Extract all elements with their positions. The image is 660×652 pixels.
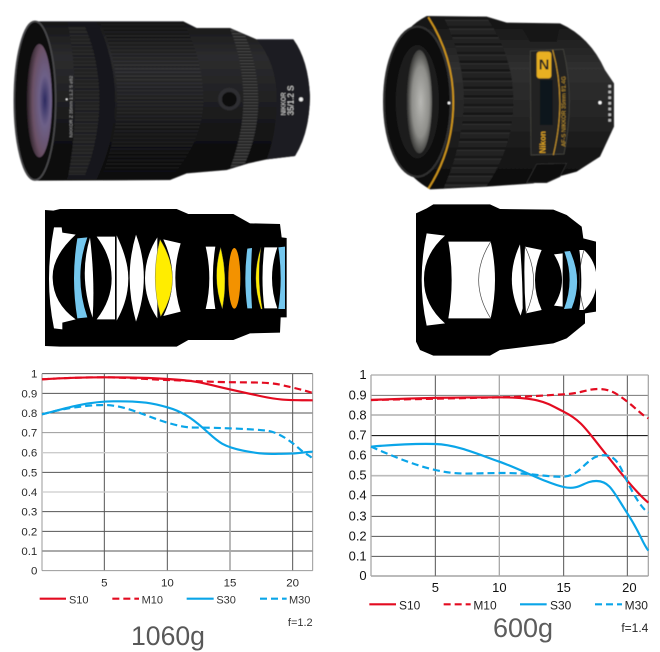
y axis labels: 0.8 <box>349 407 367 422</box>
y axis labels: 0.7 <box>21 428 37 440</box>
curve S30 <box>42 401 313 454</box>
weight: 1060g: 1060g <box>131 621 205 651</box>
lens photo: Nikkor AF-S 35mm f/1.4G <box>384 16 614 189</box>
y axis labels: 0 <box>31 565 37 577</box>
x axis labels: 5 <box>432 580 439 595</box>
lens contacts <box>608 85 611 122</box>
curve S10 <box>42 377 313 400</box>
optical diagram: Z 35mm f/1.2 <box>45 209 287 347</box>
x axis labels: 10 <box>492 580 507 595</box>
y axis labels: 0.5 <box>349 468 367 483</box>
y axis labels <box>21 368 38 577</box>
grid <box>42 373 313 571</box>
y axis labels: 0.9 <box>21 388 37 400</box>
y axis labels: 1 <box>31 368 37 380</box>
optical diagram: AF-S 35mm f/1.4 <box>416 204 597 356</box>
legend: S30 <box>550 598 572 612</box>
x axis labels: 5 <box>101 578 108 590</box>
legend: M10 <box>142 595 163 607</box>
y axis labels <box>349 367 367 583</box>
x axis labels: 15 <box>556 580 571 595</box>
curve M30 <box>42 405 313 459</box>
x axis labels: 15 <box>224 578 236 590</box>
x axis labels: 20 <box>622 580 637 595</box>
gold nameplate <box>530 49 569 155</box>
y axis labels: 0.6 <box>21 448 37 460</box>
legend <box>40 595 310 607</box>
x axis labels <box>432 580 637 595</box>
lens marking text: 35/1.2 S <box>286 86 295 115</box>
curve S30 <box>371 444 648 551</box>
MTF chart: f=1.2 <box>21 368 313 629</box>
curve M10 <box>42 377 313 393</box>
f-number: f=1.4 <box>621 621 649 635</box>
x axis labels: 20 <box>286 578 299 590</box>
legend <box>369 598 648 612</box>
switches <box>527 163 567 183</box>
legend: M10 <box>473 598 497 612</box>
legend: M30 <box>625 598 648 612</box>
y axis labels: 0.7 <box>349 428 367 443</box>
focus mode button <box>218 88 241 110</box>
weight: 600g: 600g <box>493 613 553 643</box>
y axis labels: 0.3 <box>21 507 37 519</box>
y axis labels: 0.1 <box>21 546 37 558</box>
y axis labels: 1 <box>359 367 367 382</box>
gold nameplate: Nikon <box>539 131 548 153</box>
y axis labels: 0 <box>359 568 367 583</box>
curve M30 <box>371 447 648 513</box>
lens photo: Nikkor Z 35mm f/1.2 S <box>14 21 310 181</box>
x axis labels <box>101 578 299 590</box>
grid <box>371 375 648 576</box>
y axis labels: 0.9 <box>349 387 367 402</box>
y axis labels: 0.3 <box>349 508 367 523</box>
gold nameplate: AF-S NIKKOR 35mm f/1.4G <box>561 76 567 147</box>
curve M10 <box>371 389 648 418</box>
lens marking text: NIKKOR <box>282 92 288 115</box>
legend: S30 <box>216 595 236 607</box>
legend: M30 <box>289 595 310 607</box>
legend: S10 <box>399 598 421 612</box>
y axis labels: 0.2 <box>21 526 37 538</box>
y axis labels: 0.4 <box>21 487 38 499</box>
y axis labels: 0.1 <box>349 548 367 563</box>
y axis labels: 0.4 <box>349 488 367 503</box>
y axis labels: 0.8 <box>21 408 37 420</box>
y axis labels: 0.5 <box>21 467 37 479</box>
legend: S10 <box>69 595 89 607</box>
x axis labels: 10 <box>161 578 174 590</box>
curve S10 <box>371 397 648 503</box>
MTF chart: f=1.4 <box>349 367 649 635</box>
lens marking text <box>66 75 303 137</box>
y axis labels: 0.6 <box>349 448 367 463</box>
gold nameplate: N <box>539 57 549 73</box>
f-number: f=1.2 <box>288 617 313 629</box>
lens marking text: NIKKOR Z 35mm 1:1.2 S ⌀82 <box>68 75 73 137</box>
y axis labels: 0.2 <box>349 528 367 543</box>
